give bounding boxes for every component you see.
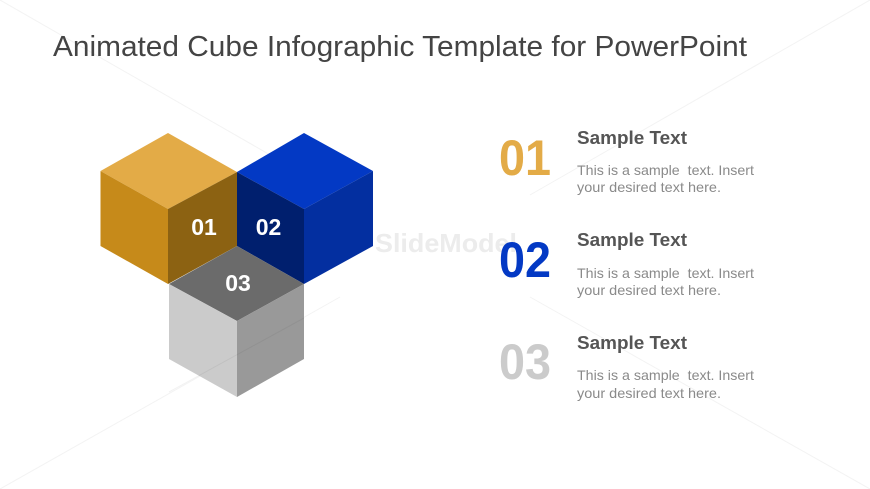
body text 01: This is a sample text. Insert — [577, 162, 754, 178]
body text 02: This is a sample text. Insert — [577, 265, 754, 281]
body text 03: This is a sample text. Insert — [577, 367, 754, 383]
cube 03: grey — [169, 246, 304, 397]
body text 02: your desired text here. — [577, 282, 721, 298]
cube label 02: 02 — [256, 214, 281, 240]
cube 02: blue — [237, 133, 373, 284]
cube infographic — [100, 133, 373, 397]
number 01: 01 — [499, 130, 551, 186]
item 01 — [499, 128, 754, 195]
number 02: 02 — [499, 232, 551, 288]
body text 03: your desired text here. — [577, 385, 721, 401]
heading 02: Sample Text — [577, 230, 687, 250]
item 03 — [499, 333, 754, 401]
item 02 — [499, 230, 754, 298]
cube 01: gold — [100, 133, 237, 284]
cube label 03: 03 — [225, 270, 251, 296]
heading 01: Sample Text — [577, 128, 687, 148]
heading 03: Sample Text — [577, 333, 687, 353]
title: Animated Cube Infographic Template for PowerPoint — [53, 31, 747, 63]
cube label 01: 01 — [191, 214, 217, 240]
body text 01: your desired text here. — [577, 179, 721, 195]
number 03: 03 — [499, 334, 551, 390]
watermark: SlideModel — [375, 228, 517, 258]
